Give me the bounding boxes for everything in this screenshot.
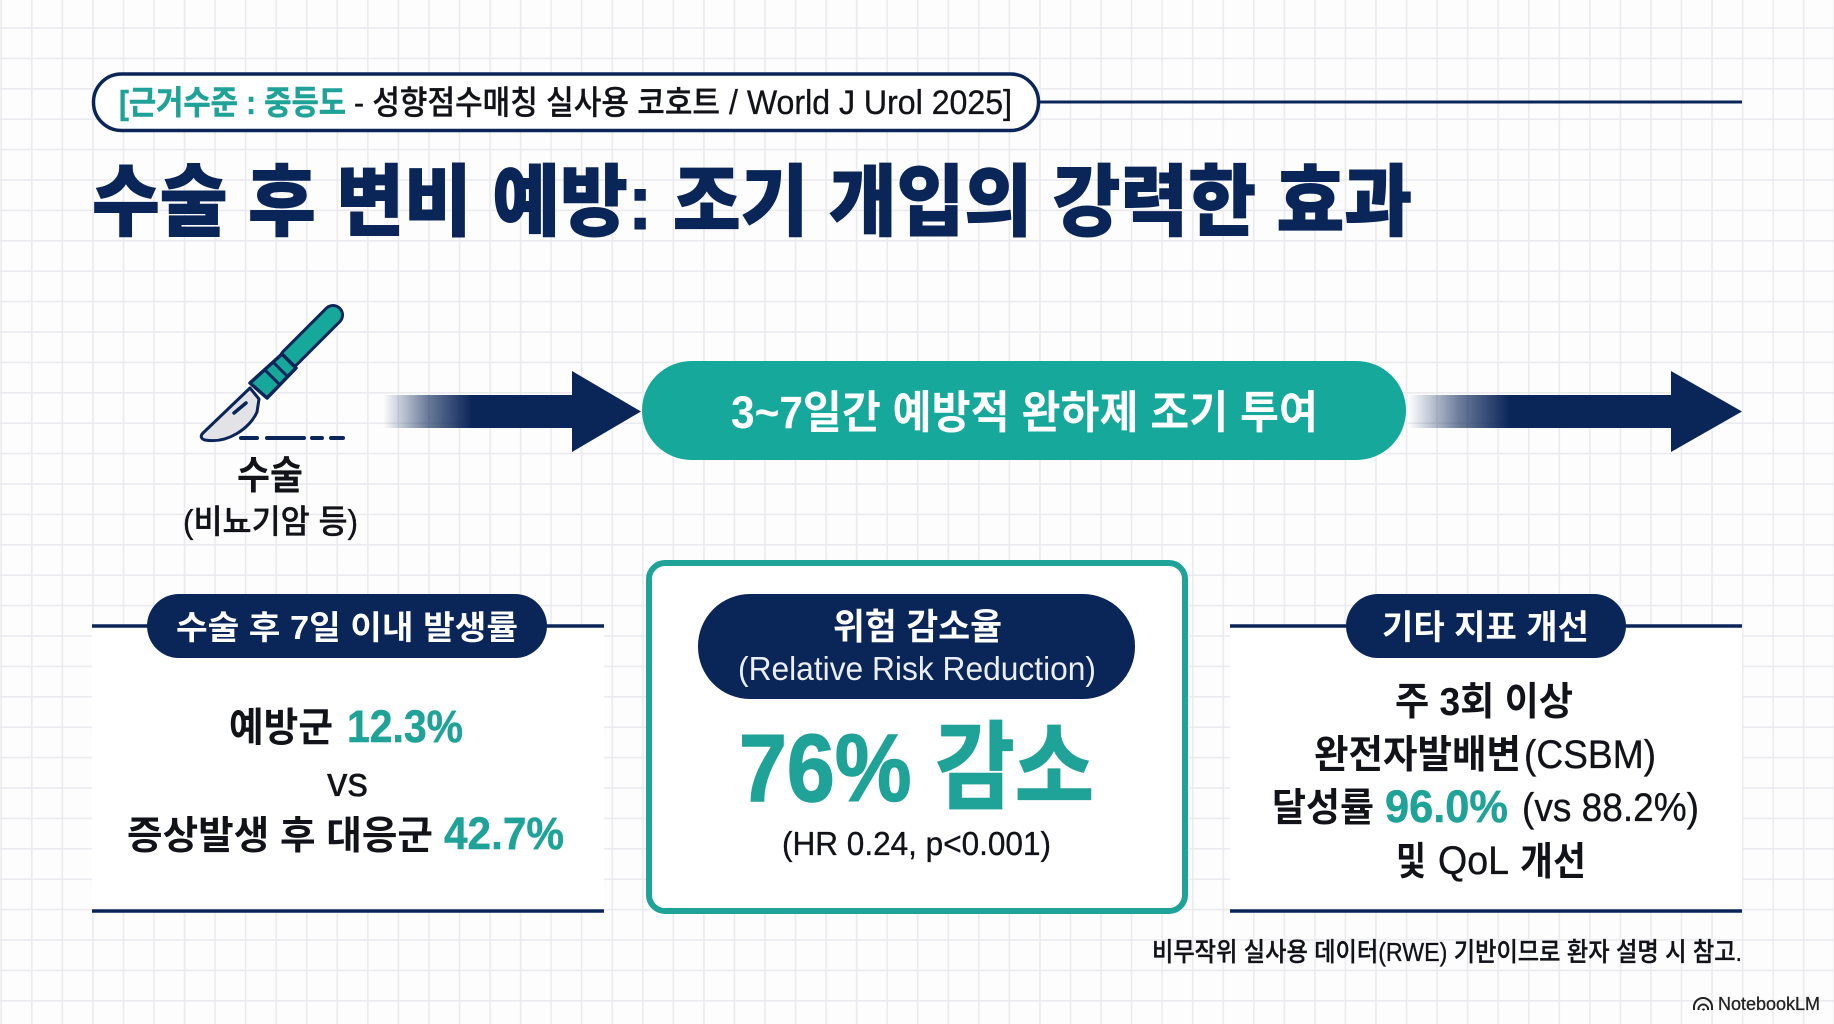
- panel heading: 기타 지표 개선: [1382, 609, 1589, 647]
- reactive group rate: 42.7%: [444, 808, 564, 859]
- outcome text: [1272, 681, 1699, 884]
- outcome text: (CSBM): [1524, 733, 1656, 777]
- surgery label: 수술: [237, 455, 303, 498]
- surgery label: [183, 455, 358, 540]
- reactive group rate: 증상발생 후 대응군: [127, 815, 433, 858]
- outcome text: 완전자발배변: [1314, 734, 1521, 777]
- prevention group rate: 예방군: [229, 706, 333, 750]
- NotebookLM watermark: NotebookLM: [1718, 994, 1820, 1014]
- evidence level tag: - 성향점수매칭 실사용 코호트: [354, 84, 720, 121]
- vs: vs: [327, 758, 368, 805]
- panel heading: 위험 감소율: [833, 606, 1002, 647]
- prevention group rate: [229, 701, 463, 752]
- treatment banner: 3~7일간 예방적 완하제 조기 투여: [731, 387, 1318, 438]
- icon: scalpel with incision line: [201, 315, 343, 441]
- panel heading: 수술 후 7일 이내 발생률: [176, 609, 518, 646]
- panel: other outcomes: [1230, 594, 1742, 911]
- outcome text: 96.0%: [1385, 781, 1508, 832]
- panel: relative risk reduction: [649, 563, 1185, 911]
- title: 수술 후 변비 예방: 조기 개입의 강력한 효과: [92, 158, 1412, 246]
- panel heading: [147, 594, 547, 658]
- evidence level tag: [근거수준 : 중등도: [119, 84, 346, 121]
- outcome text: 개선: [1520, 841, 1586, 884]
- outcome text: (vs 88.2%): [1522, 786, 1699, 830]
- footnote: 비무작위 실사용 데이터(RWE) 기반이므로 환자 설명 시 참고.: [1152, 937, 1742, 967]
- panel heading: (Relative Risk Reduction): [738, 650, 1096, 687]
- key figure: 76% 감소: [739, 715, 1094, 822]
- prevention group rate: 12.3%: [347, 701, 463, 752]
- arrow: surgery to treatment: [383, 371, 641, 452]
- surgery label: (비뇨기암 등): [183, 503, 358, 540]
- arrow: treatment to outcomes: [1409, 371, 1742, 452]
- outcome text: 주 3회 이상: [1395, 681, 1573, 724]
- outcome text: 및: [1396, 841, 1426, 884]
- panel heading: [698, 594, 1135, 699]
- reactive group rate: [127, 808, 564, 859]
- evidence level tag: / World J Urol 2025]: [729, 84, 1012, 122]
- treatment banner: [642, 361, 1406, 460]
- outcome text: 달성률: [1272, 787, 1374, 830]
- panel: incidence within 7 days: [92, 594, 604, 911]
- panel heading: [1346, 594, 1626, 658]
- hazard ratio: (HR 0.24, p<0.001): [782, 825, 1051, 862]
- outcome text: QoL: [1438, 839, 1509, 883]
- evidence level tag: [94, 74, 1742, 130]
